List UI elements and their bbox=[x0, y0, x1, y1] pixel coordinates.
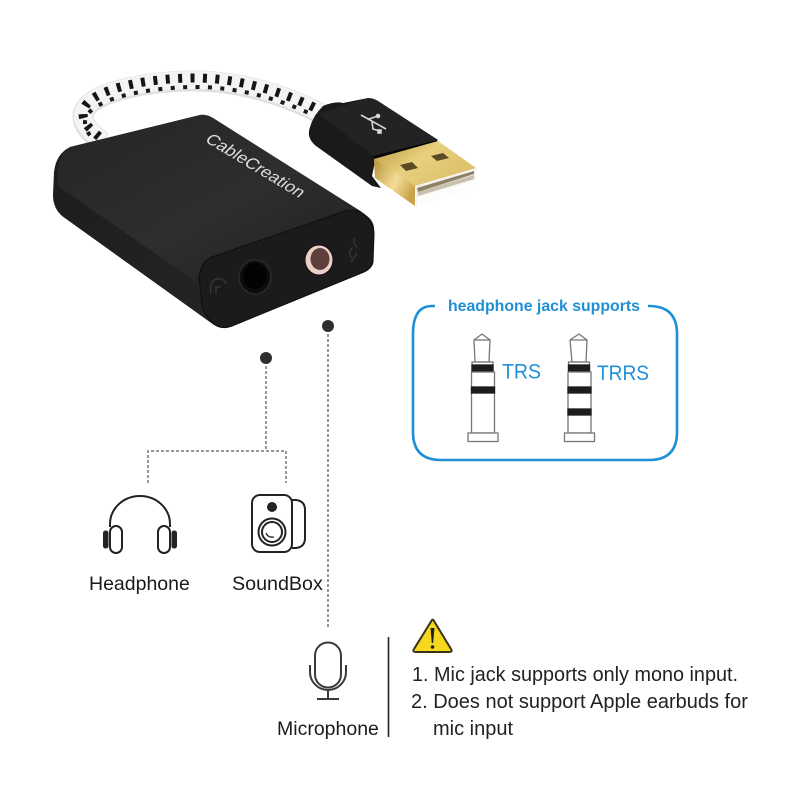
brand text: CableCreation bbox=[201, 130, 310, 201]
notes text: 2. Does not support Apple earbuds for bbox=[411, 691, 748, 713]
panel heading: headphone jack supports bbox=[448, 298, 640, 315]
icon: soundbox bbox=[252, 495, 305, 552]
bracket to headphone and soundbox bbox=[148, 451, 286, 483]
TRRS label: TRRS bbox=[597, 362, 649, 385]
notes text: 1. Mic jack supports only mono input. bbox=[412, 664, 738, 686]
label: microphone: Microphone bbox=[277, 718, 379, 740]
label: headphone: Headphone bbox=[89, 573, 190, 595]
braided cable bbox=[83, 78, 327, 148]
adapter body bbox=[53, 115, 374, 328]
socket glyphs bbox=[211, 238, 357, 294]
label: soundbox: SoundBox bbox=[232, 573, 323, 595]
icon: microphone bbox=[310, 642, 346, 699]
panel: headphone jack supports bbox=[413, 298, 677, 460]
mic socket bbox=[305, 245, 333, 275]
icon: headphone bbox=[104, 496, 176, 553]
panel border bbox=[413, 306, 677, 460]
notes text: mic input bbox=[433, 718, 513, 740]
microphone connector dot and line bbox=[322, 320, 334, 627]
TRS label: TRS bbox=[502, 360, 541, 384]
notes text bbox=[411, 664, 748, 740]
USB audio adapter photo bbox=[53, 78, 476, 328]
front face bbox=[199, 210, 374, 328]
headphone socket bbox=[239, 260, 271, 294]
gold USB connector bbox=[374, 141, 476, 206]
divider bbox=[388, 637, 390, 737]
TRS plug bbox=[468, 334, 498, 442]
USB symbol bbox=[361, 114, 386, 133]
USB plug housing bbox=[309, 98, 438, 188]
TRRS plug bbox=[564, 334, 594, 442]
headphone connector dot and line bbox=[260, 352, 272, 451]
icon: warning triangle bbox=[413, 620, 452, 652]
